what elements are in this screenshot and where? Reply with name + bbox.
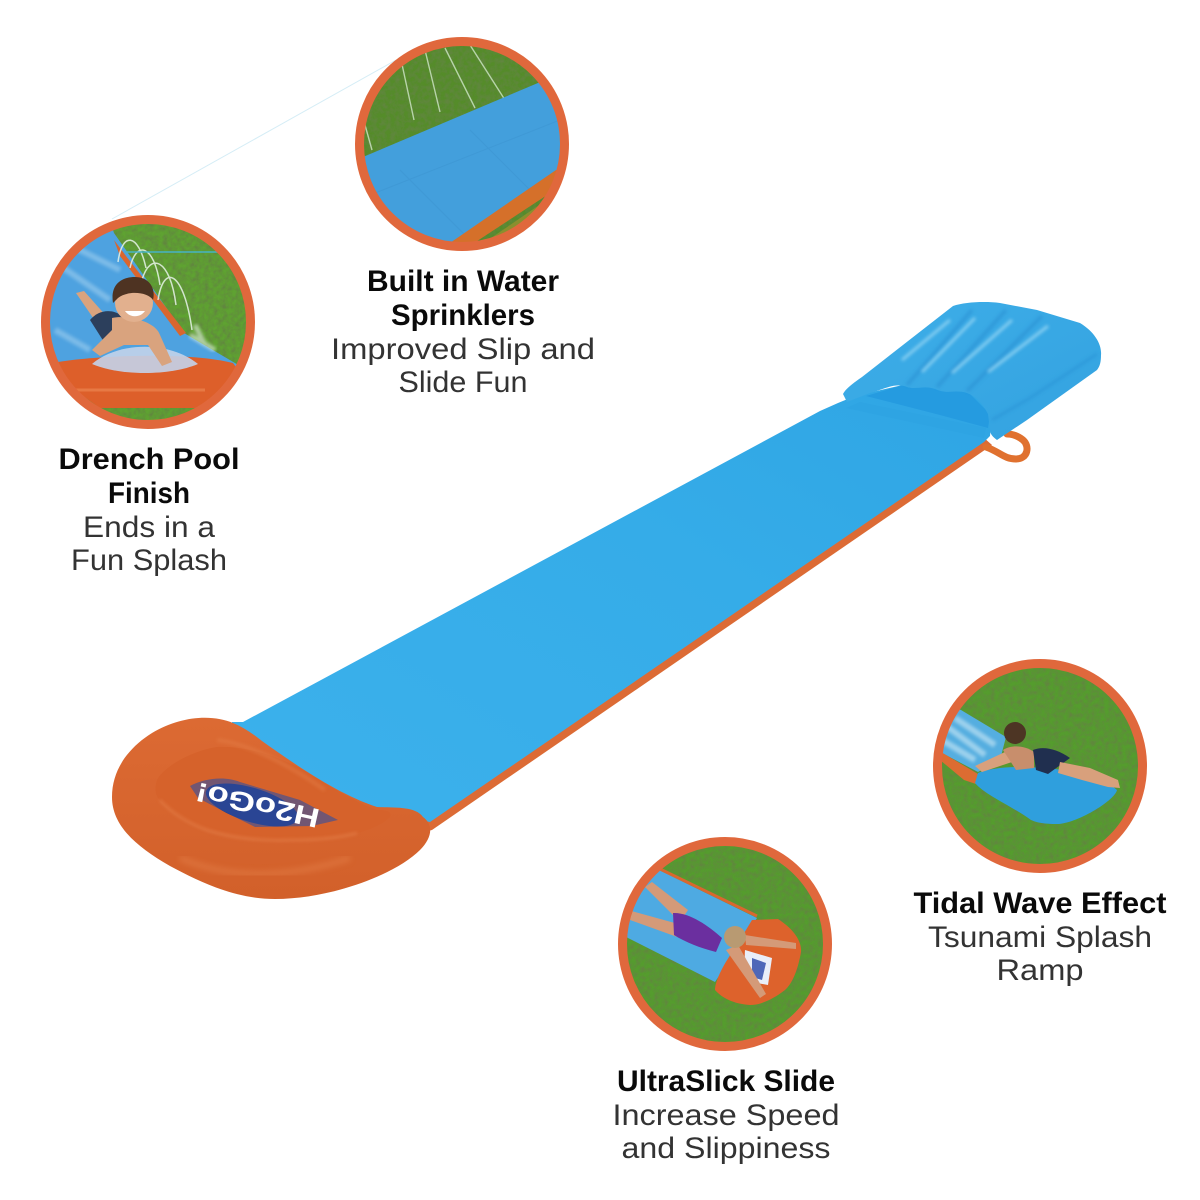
photo: sprinkler lines over slide [364,46,560,242]
feature text: Finish [108,477,190,510]
boy [76,277,172,366]
callout: ultraslick slide [612,837,840,1165]
orange ring [360,42,564,246]
orange ring [46,220,250,424]
feature text: Increase Speed [612,1099,840,1132]
feature text: Slide Fun [398,366,528,399]
boy [975,722,1120,788]
seam band below ramp [846,402,986,438]
splash pool [715,919,801,1005]
orange splash pool end cap [112,718,430,899]
feature text [58,443,240,577]
feature text: Built in Water [367,265,559,298]
product: water slide [112,302,1101,899]
feature text: Ramp [996,954,1084,987]
callout: built in water sprinklers [331,37,595,399]
tow handle loop [986,434,1027,459]
feature text: Tsunami Splash [928,921,1152,954]
slide blue sheet [232,384,992,822]
feature text: Fun Splash [71,544,227,577]
ramp inner recess [866,384,990,428]
feature text [612,1065,840,1165]
brand logo [190,775,338,835]
callout: drench pool finish [41,215,255,577]
feature text: Drench Pool [58,443,240,476]
callout: tidal wave effect [914,659,1166,987]
feature text: UltraSlick Slide [617,1065,835,1098]
photo: boy splashing into pool [50,224,246,420]
feature text: Tidal Wave Effect [914,887,1166,920]
feature text: Ends in a [83,511,215,544]
orange ring [622,842,828,1046]
inflatable wave ramp [843,302,1101,440]
girl [628,882,796,998]
photo: girl reaching pool [627,846,823,1042]
feature text: and Slippiness [622,1132,830,1165]
photo: boy on inflatable ramp [942,668,1138,864]
decorative connector hairline [112,60,396,219]
brand logo: H2oGo! [193,776,322,833]
feature text: Improved Slip and [331,333,595,366]
feature text [331,265,595,399]
feature text [914,887,1166,987]
orange ring [938,664,1142,868]
slide orange side edge [420,437,992,832]
feature text: Sprinklers [391,299,535,332]
